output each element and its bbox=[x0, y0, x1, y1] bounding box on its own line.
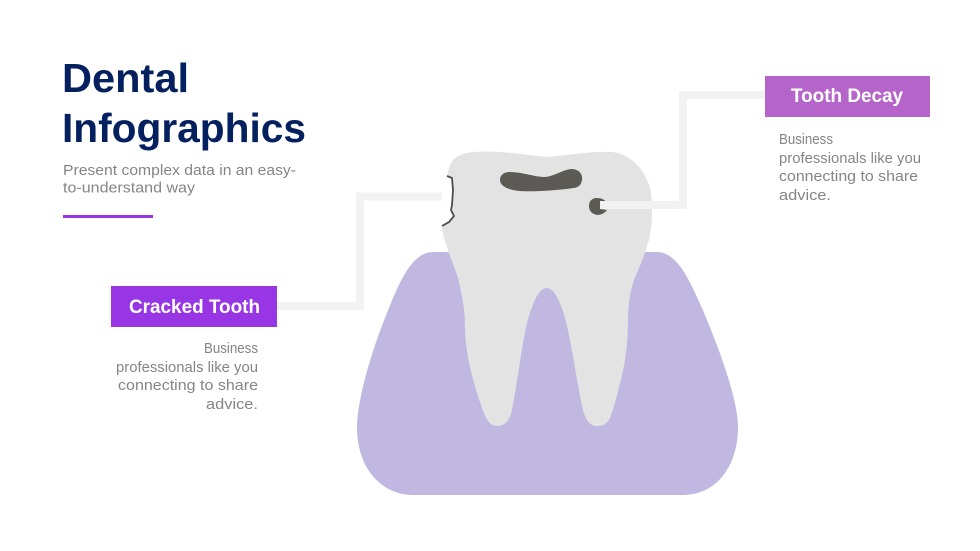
text: cracked tooth description: connecting to share bbox=[118, 378, 258, 394]
label: cracked tooth: Cracked Tooth bbox=[129, 297, 260, 318]
label: cracked tooth bbox=[111, 286, 277, 327]
title underline bbox=[63, 215, 153, 218]
tooth bbox=[442, 152, 652, 426]
label: tooth decay: Tooth Decay bbox=[791, 86, 903, 107]
text: cracked tooth description: professionals like you bbox=[116, 360, 258, 376]
text: cracked tooth description: Business bbox=[204, 341, 258, 357]
gum bbox=[357, 252, 738, 495]
text: tooth decay description: professionals like you bbox=[779, 151, 921, 167]
text: cracked tooth description bbox=[116, 341, 258, 413]
text: tooth decay description bbox=[779, 132, 921, 204]
title: Dental bbox=[62, 55, 189, 101]
subtitle: Present complex data in an easy- bbox=[63, 163, 296, 179]
text: cracked tooth description: advice. bbox=[206, 397, 258, 413]
subtitle: to-understand way bbox=[63, 180, 196, 196]
subtitle bbox=[63, 163, 296, 196]
cavity: top decay bbox=[500, 169, 582, 191]
text: tooth decay description: Business bbox=[779, 132, 833, 148]
connector: tooth decay bbox=[600, 95, 765, 205]
tooth body bbox=[442, 152, 652, 426]
title bbox=[62, 55, 306, 151]
label: tooth decay bbox=[765, 76, 930, 117]
title: Infographics bbox=[62, 105, 306, 151]
connector: cracked tooth bbox=[277, 196, 442, 306]
cavity: side decay bbox=[589, 198, 607, 215]
crack bbox=[442, 176, 454, 226]
text: tooth decay description: advice. bbox=[779, 188, 831, 204]
text: tooth decay description: connecting to share bbox=[779, 169, 918, 185]
